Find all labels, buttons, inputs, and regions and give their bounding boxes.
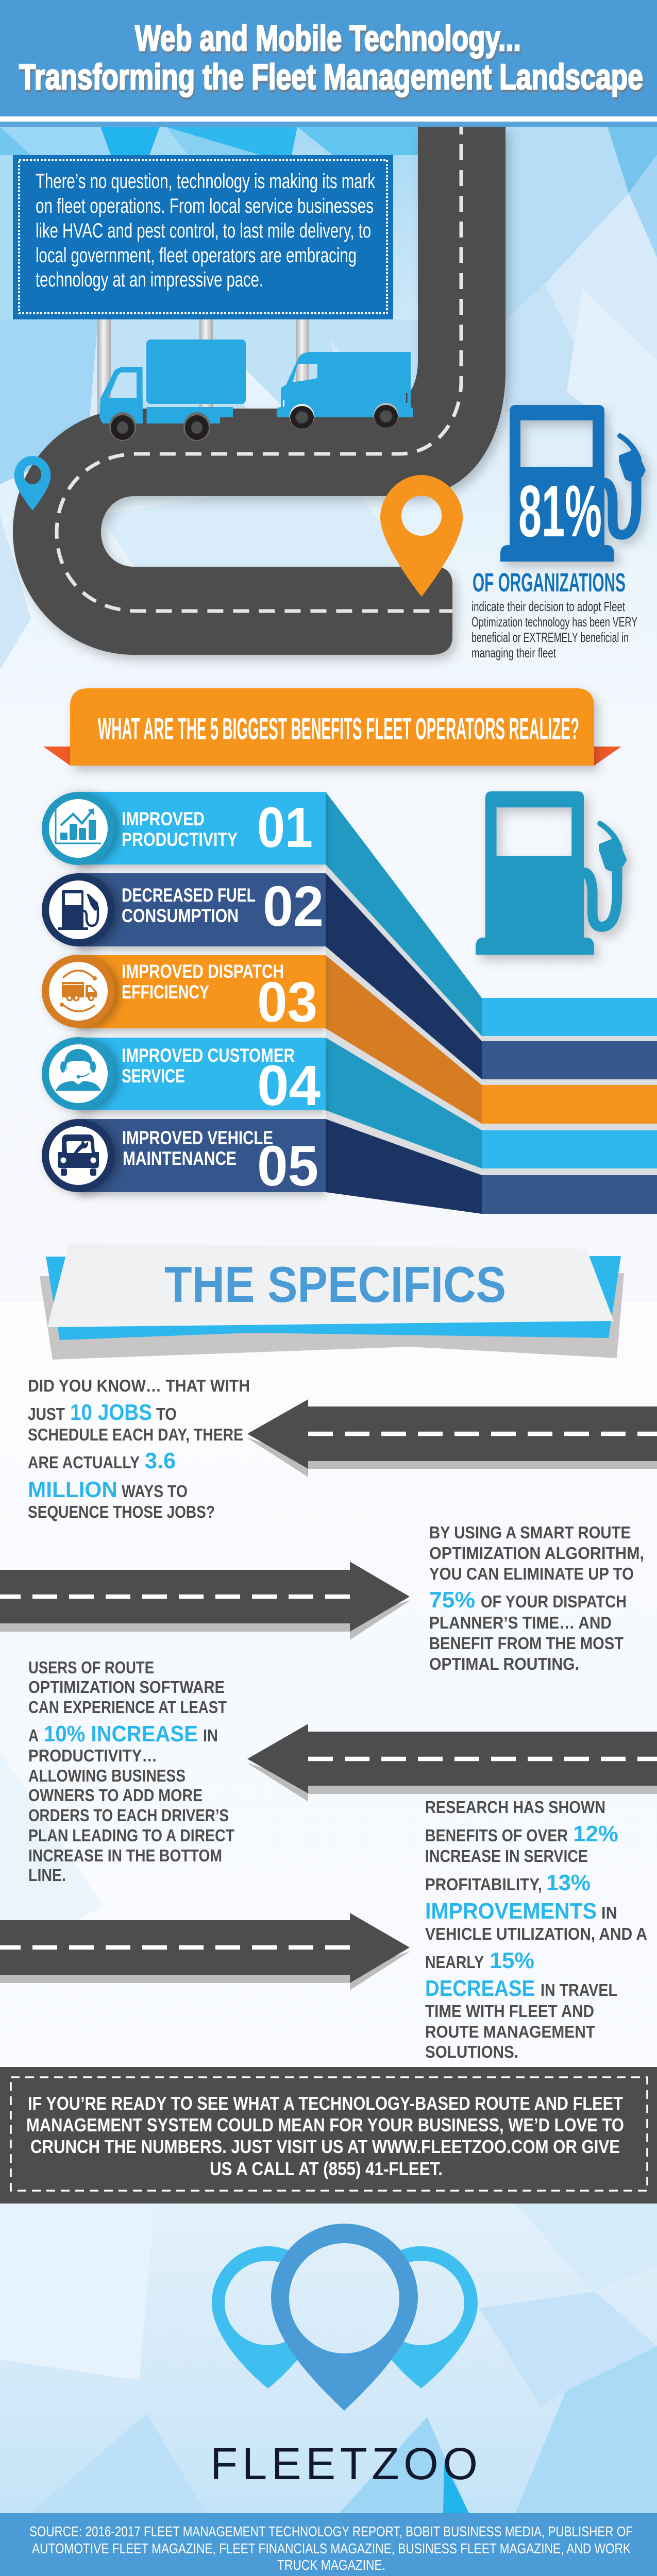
fact 3 text: USERS OF ROUTE — [28, 1658, 154, 1677]
fact 3 text: PRODUCTIVITY… — [28, 1746, 157, 1765]
intro text: on fleet operations. From local service businesses — [36, 195, 374, 217]
fact 2 text: 75% — [429, 1587, 475, 1613]
ribbons perspective — [326, 792, 657, 1214]
intro text: technology at an impressive pace. — [36, 268, 263, 291]
stat description — [471, 599, 637, 660]
fact 3 text: CAN EXPERIENCE AT LEAST — [28, 1698, 227, 1717]
icon: growth chart — [56, 806, 101, 843]
fact 2 text: OPTIMAL ROUTING. — [429, 1654, 579, 1673]
fuel pump with 81 percent — [500, 405, 646, 562]
title: Web and Mobile Technology... — [135, 18, 521, 58]
intro text: local government, fleet operators are embracing — [36, 244, 357, 267]
fact 1 text — [28, 1376, 250, 1521]
the specifics banner — [40, 1243, 624, 1360]
fact 3 text: PLAN LEADING TO A DIRECT — [28, 1826, 234, 1845]
intro text: There’s no question, technology is making its mark — [36, 170, 376, 193]
fact 1 text: SCHEDULE EACH DAY, THERE — [28, 1425, 243, 1444]
benefit 01 — [42, 792, 326, 865]
icon: blue map pin — [14, 456, 50, 511]
benefit 03: IMPROVED DISPATCH — [122, 961, 284, 982]
fact 3 text: OPTIMIZATION SOFTWARE — [28, 1677, 225, 1697]
fact 3 text: LINE. — [28, 1866, 66, 1885]
benefit 03 — [42, 955, 326, 1034]
source footer — [0, 2513, 657, 2576]
fact 1 text: SEQUENCE THOSE JOBS? — [28, 1502, 215, 1521]
road — [13, 127, 506, 655]
fact 4 text: NEARLY — [425, 1953, 484, 1972]
fact 3 text: ALLOWING BUSINESS — [28, 1766, 186, 1785]
benefit 02: CONSUMPTION — [122, 905, 239, 926]
call to action panel — [0, 2067, 657, 2204]
fact 4 text: SOLUTIONS. — [425, 2042, 518, 2061]
icon: large teal fuel pump — [476, 791, 627, 955]
benefit 04: SERVICE — [122, 1065, 185, 1087]
fact 4 text — [425, 1798, 647, 2061]
benefit 03: EFFICIENCY — [122, 981, 209, 1003]
intro text — [36, 170, 376, 291]
fact 2 text: PLANNER’S TIME… AND — [429, 1613, 612, 1632]
fact 1 text: JUST — [28, 1404, 65, 1423]
fact 3 text: INCREASE IN THE BOTTOM — [28, 1846, 222, 1865]
arrow 4 — [0, 1913, 411, 1990]
truck — [99, 340, 246, 441]
icon: orange map pin — [380, 475, 463, 597]
lower background — [0, 2204, 657, 2513]
arrow 1 — [246, 1399, 657, 1477]
call to action text: US A CALL AT (855) 41-FLEET. — [210, 2158, 443, 2179]
fact 4 text: IN TRAVEL — [541, 1980, 617, 1999]
benefit 05: 05 — [257, 1134, 318, 1198]
benefit 04: IMPROVED CUSTOMER — [122, 1045, 295, 1066]
benefit 01: IMPROVED — [122, 808, 205, 829]
benefit 02 — [42, 873, 326, 946]
fact 4 text: IN — [601, 1903, 617, 1922]
fact 4 text: BENEFITS OF OVER — [425, 1826, 568, 1845]
fact 4 text: TIME WITH FLEET AND — [425, 2002, 594, 2021]
icon: central map pin — [271, 2224, 418, 2411]
fact 4 text: PROFITABILITY, — [425, 1875, 542, 1894]
fact 3 text: 10% INCREASE — [44, 1721, 198, 1747]
benefit 05: IMPROVED VEHICLE — [122, 1127, 273, 1148]
icon: support agent — [56, 1049, 101, 1091]
logo wordmark: FLEETZOO — [210, 2439, 478, 2489]
icon: dispatch truck — [60, 971, 97, 1011]
fact 4 text: RESEARCH HAS SHOWN — [425, 1798, 605, 1817]
fact 2 text: BENEFIT FROM THE MOST — [429, 1634, 624, 1653]
intro text: like HVAC and pest control, to last mile delivery, to — [36, 219, 371, 242]
fact 4 text: DECREASE — [425, 1976, 535, 2001]
benefit 02: DECREASED FUEL — [122, 885, 256, 906]
fact 2 text: OF YOUR DISPATCH — [481, 1592, 627, 1611]
icon: fuel pump small — [58, 890, 99, 930]
fact 4 text: ROUTE MANAGEMENT — [425, 2022, 595, 2041]
fact 2 text — [429, 1523, 644, 1673]
benefit 01: PRODUCTIVITY — [122, 829, 238, 850]
fact 3 text: A — [28, 1726, 39, 1745]
fact 1 text: DID YOU KNOW… THAT WITH — [28, 1376, 250, 1395]
icon: fuel pump — [500, 405, 646, 562]
fleetzoo logo — [210, 2224, 478, 2489]
fact 2 text: OPTIMIZATION ALGORITHM, — [429, 1544, 644, 1563]
benefit 02: 02 — [263, 875, 324, 938]
fact 4 text: IMPROVEMENTS — [425, 1899, 597, 1924]
fact 1 text: 3.6 — [145, 1448, 176, 1473]
fact 2 text: BY USING A SMART ROUTE — [429, 1523, 631, 1542]
heading: the specifics: THE SPECIFICS — [164, 1256, 506, 1313]
fact 4 text: 12% — [573, 1821, 618, 1846]
fact 3 text: IN — [203, 1726, 218, 1745]
arrow 3 — [246, 1724, 657, 1802]
icon: car with wrench — [58, 1134, 99, 1176]
orange banner — [43, 688, 621, 766]
source footer: TRUCK MAGAZINE. — [277, 2557, 385, 2573]
intro sign — [13, 155, 393, 319]
sign posts — [97, 319, 309, 422]
arrow 2 — [0, 1562, 411, 1640]
fact 1 text: WAYS TO — [122, 1482, 188, 1501]
background — [0, 127, 657, 2067]
fact 4 text: 15% — [490, 1948, 534, 1973]
fact 1 text: ARE ACTUALLY — [28, 1453, 140, 1472]
benefit 05 — [42, 1119, 326, 1198]
fact 1 text: MILLION — [28, 1477, 117, 1502]
benefit 05: MAINTENANCE — [123, 1148, 237, 1169]
benefit 03: 03 — [257, 971, 317, 1034]
fact 3 text: ORDERS TO EACH DRIVER’S — [28, 1806, 229, 1825]
fact 4 text: 13% — [546, 1870, 591, 1895]
call to action text — [26, 2093, 624, 2179]
van — [277, 352, 413, 429]
fact 1 text: TO — [156, 1404, 177, 1423]
fact 1 text: 10 JOBS — [70, 1400, 152, 1425]
fact 4 text: INCREASE IN SERVICE — [425, 1846, 588, 1866]
fact 3 text: OWNERS TO ADD MORE — [28, 1786, 203, 1805]
benefit 04 — [42, 1037, 326, 1117]
stat description: managing their fleet — [471, 645, 557, 660]
benefit 01: 01 — [257, 796, 313, 859]
fact 2 text: YOU CAN ELIMINATE UP TO — [429, 1564, 634, 1583]
fact 3 text — [28, 1658, 234, 1885]
benefit 04: 04 — [257, 1054, 321, 1117]
title — [19, 18, 643, 97]
header band — [0, 0, 657, 127]
icon: side map pins — [212, 2246, 478, 2388]
